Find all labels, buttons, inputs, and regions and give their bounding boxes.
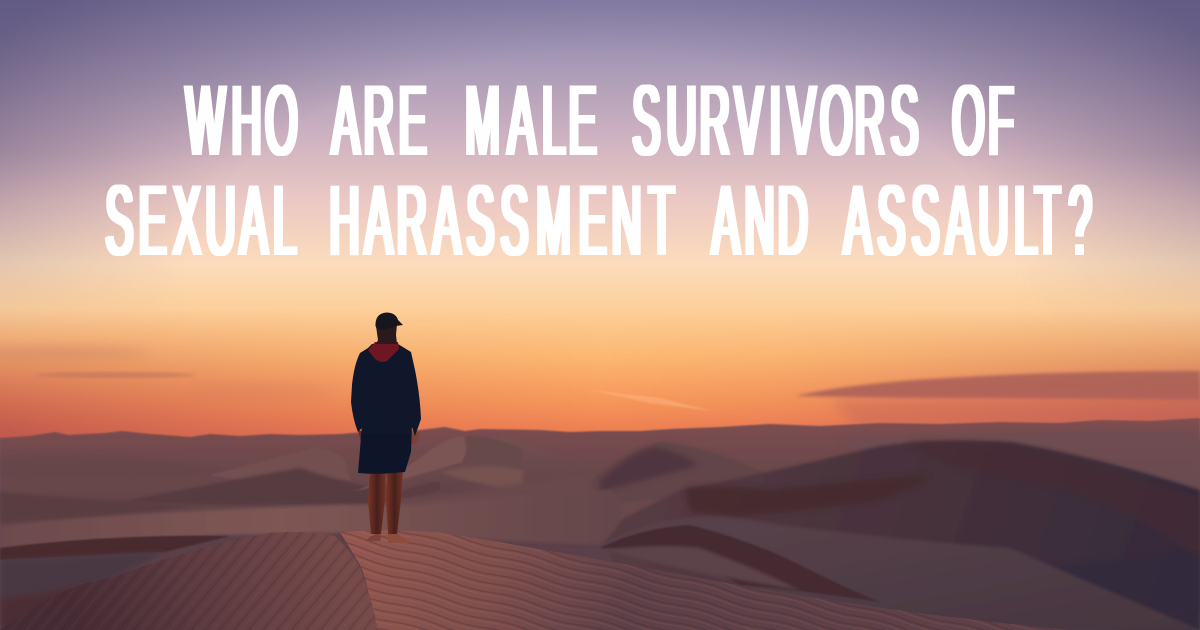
hands	[358, 430, 420, 445]
title line 1: OF	[952, 66, 1014, 177]
far dune horizon	[0, 418, 1200, 630]
distant right dunes shading	[840, 430, 1200, 490]
dunes behind figure on right	[352, 436, 780, 540]
clouds near horizon	[0, 348, 1200, 428]
foreground mid dune right	[600, 517, 1200, 630]
title	[106, 66, 1092, 277]
figure: man standing seen from behind	[351, 312, 421, 543]
mid-left dune field	[0, 447, 370, 522]
large dark dune right	[600, 441, 1200, 630]
jacket	[351, 344, 421, 436]
deep blue lower right sand	[970, 556, 1200, 614]
title line 1: MALE	[465, 66, 596, 177]
title line 2: AND	[712, 166, 808, 277]
foreground ripple dune right	[340, 530, 1070, 630]
title line 1: WHO	[186, 66, 298, 177]
dune crest shadow right	[905, 441, 1200, 560]
sky background	[0, 0, 1200, 440]
middle band dune	[0, 490, 623, 548]
title line 2: HARASSMENT	[330, 166, 674, 277]
title line 2: SEXUAL	[106, 166, 296, 277]
dark crease right	[685, 475, 930, 517]
foreground slope left	[0, 532, 378, 630]
shorts	[358, 425, 412, 474]
hood	[368, 342, 399, 362]
legs	[366, 470, 410, 543]
title line 1: SURVIVORS	[633, 66, 918, 177]
title line 2: ASSAULT?	[844, 166, 1092, 277]
head and cap	[375, 312, 403, 344]
left shadow hollow	[0, 536, 230, 630]
title line 1: ARE	[332, 66, 426, 177]
